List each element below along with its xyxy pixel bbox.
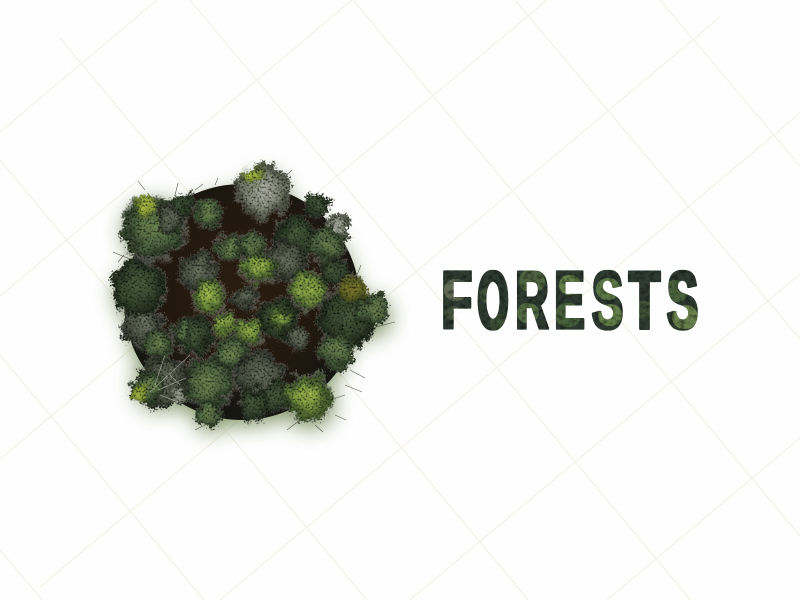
title: FORESTS: O xyxy=(478,254,508,347)
forest floor disc xyxy=(124,184,360,420)
title: FORESTS: T xyxy=(629,254,660,347)
title: FORESTS: F xyxy=(442,254,472,347)
tree canopies xyxy=(108,163,392,430)
title: FORESTS: E xyxy=(554,254,584,347)
bare branches xyxy=(113,170,395,432)
pale branches on lower-left tree xyxy=(150,355,190,402)
title: FORESTS: S xyxy=(667,254,698,347)
forest illustration xyxy=(108,163,395,433)
title: FORESTS: S xyxy=(592,254,623,347)
forest green glow xyxy=(114,174,391,433)
title: FORESTS xyxy=(442,254,698,347)
title: FORESTS: R xyxy=(516,254,548,347)
